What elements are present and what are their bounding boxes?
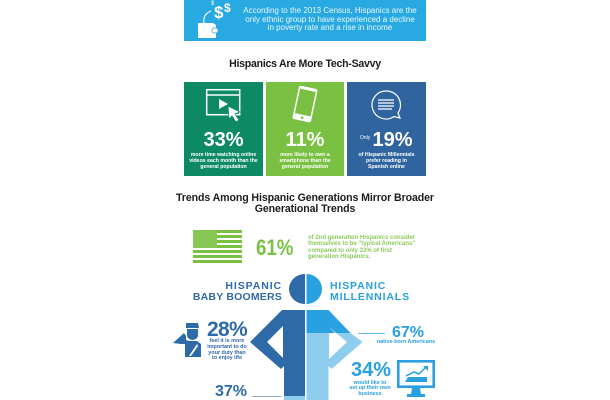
icon: monitor with chart [397, 360, 435, 397]
card text: general population [200, 164, 247, 170]
card text: videos each month than the [189, 158, 258, 164]
icon: speech bubble [371, 90, 402, 120]
card text: smartphone than the [279, 158, 331, 164]
card text: more likely to own a [280, 152, 330, 158]
61% description: themselves to be "typical Americans" [308, 241, 415, 247]
icon: wallet and money: $ [224, 1, 231, 15]
label: Hispanic baby boomers [193, 280, 282, 303]
banner text: in poverty rate and a rise in income [268, 23, 392, 32]
heading: generational trends: Trends Among Hispanic Generations Mirror Broader [176, 192, 434, 204]
28% description: to enjoy life [212, 355, 242, 361]
icon: wallet and money: $ [211, 1, 215, 7]
28% description: feel it is more [210, 338, 244, 344]
28% description: important to do [207, 344, 247, 350]
panel: census banner [184, 0, 426, 41]
heading: generational trends [176, 192, 434, 215]
card text: general population [282, 164, 328, 170]
28% description: your duty than [208, 350, 246, 356]
stat: 67%: 67% [392, 324, 424, 340]
stat: 11%: 11% [286, 129, 324, 151]
icon: video window [206, 88, 240, 122]
stat: 61%: 61% [256, 235, 293, 260]
icon: American flag [193, 230, 242, 263]
stat: only 19%: Only [360, 135, 370, 141]
banner text [243, 6, 417, 32]
label: Hispanic millennials: MILLENNIALS [330, 291, 410, 303]
connector line: 37% [252, 396, 281, 397]
67% description: native-born Americans [377, 339, 435, 345]
card text [189, 152, 258, 170]
34% description: would like to [354, 380, 386, 386]
34% description: business [358, 391, 382, 397]
card text [279, 152, 331, 170]
label: Hispanic millennials: HISPANIC [330, 280, 386, 292]
stat: 37%: 37% [215, 383, 247, 400]
heading: tech-savvy: Hispanics Are More Tech-Savvy [229, 58, 381, 70]
panel: online video card [184, 82, 263, 176]
61% description: generation Hispanics. [308, 254, 370, 260]
heading: generational trends: Generational Trends [255, 203, 355, 215]
card text: Spanish online [368, 164, 405, 170]
icon: wallet and money: $ [214, 3, 224, 22]
connector line: 67% [358, 333, 385, 334]
61% description: compared to only 33% of first [308, 248, 392, 254]
banner text: According to the 2013 Census, Hispanics are the [243, 6, 417, 15]
icon: saluting person [173, 323, 201, 357]
stat: only 19%: 19% [372, 129, 413, 151]
banner text: only ethnic group to have experienced a decline [245, 14, 415, 24]
stat: 34%: 34% [351, 358, 391, 380]
stat: 33%: 33% [203, 129, 244, 151]
card text: prefer reading in [366, 158, 407, 164]
icon: smartphone [292, 86, 318, 122]
28% description [207, 338, 247, 361]
card text [358, 152, 414, 170]
icon: wallet and money [198, 0, 231, 38]
61% description: of 2nd generation Hispanics consider [308, 234, 415, 240]
34% description [349, 380, 391, 397]
61% description [308, 234, 415, 260]
label: Hispanic baby boomers: BABY BOOMERS [193, 291, 282, 303]
card text: more time watching online [191, 152, 256, 158]
34% description: set up their own [349, 385, 391, 391]
panel: Spanish reading card [347, 82, 426, 176]
label: Hispanic baby boomers: HISPANIC [225, 280, 282, 292]
card text: of Hispanic Millennials [359, 152, 414, 158]
stat: 28%: 28% [207, 318, 247, 341]
panel: smartphone card [266, 82, 344, 176]
label: Hispanic millennials [330, 280, 410, 303]
